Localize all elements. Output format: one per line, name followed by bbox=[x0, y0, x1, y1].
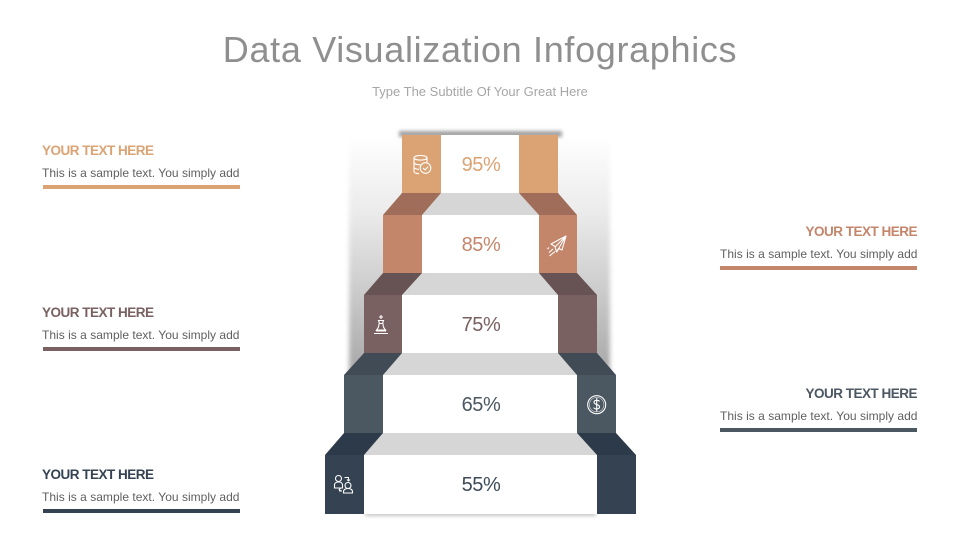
tread 65% bbox=[344, 353, 616, 375]
step 95% bbox=[402, 135, 558, 193]
icon: people exchange bbox=[334, 476, 352, 493]
step 75%: 75% bbox=[462, 314, 501, 336]
body text: This is a sample text. You simply add bbox=[720, 246, 918, 260]
rule bbox=[720, 428, 917, 432]
step 65% bbox=[344, 375, 616, 433]
step 85%: 85% bbox=[462, 234, 501, 256]
icon: database check bbox=[414, 156, 431, 174]
step 95%: 95% bbox=[462, 154, 501, 176]
rule bbox=[43, 509, 240, 513]
step 55%: 55% bbox=[462, 474, 501, 496]
body text: This is a sample text. You simply add bbox=[720, 408, 918, 422]
top shadow bbox=[399, 131, 562, 137]
icon: paper plane bbox=[548, 236, 566, 256]
wall shadow bbox=[349, 135, 610, 380]
bottom shadow bbox=[365, 512, 596, 516]
text block: 85% bbox=[720, 224, 918, 270]
tread 85% bbox=[383, 193, 577, 215]
step 55% bbox=[325, 455, 636, 514]
text block: 55% bbox=[42, 467, 240, 513]
title: Data Visualization Infographics bbox=[223, 29, 737, 70]
body text: This is a sample text. You simply add bbox=[42, 166, 240, 180]
step 75% bbox=[364, 295, 597, 353]
step 85% bbox=[383, 215, 577, 273]
body text: This is a sample text. You simply add bbox=[42, 328, 240, 342]
rule bbox=[720, 266, 917, 270]
heading: YOUR TEXT HERE bbox=[805, 386, 917, 401]
text block: 65% bbox=[720, 386, 918, 432]
tread 55% bbox=[325, 433, 636, 455]
tread 75% bbox=[364, 273, 597, 295]
subtitle: Type The Subtitle Of Your Great Here bbox=[372, 84, 588, 99]
text block: 95% bbox=[42, 143, 240, 189]
icon: dollar coin bbox=[588, 396, 606, 414]
rule bbox=[43, 347, 240, 351]
heading: YOUR TEXT HERE bbox=[42, 467, 154, 482]
step 65%: 65% bbox=[462, 394, 501, 416]
rule bbox=[43, 185, 240, 189]
body text: This is a sample text. You simply add bbox=[42, 490, 240, 504]
heading: YOUR TEXT HERE bbox=[42, 305, 154, 320]
icon: chess piece bbox=[374, 315, 388, 334]
text block: 75% bbox=[42, 305, 240, 351]
heading: YOUR TEXT HERE bbox=[805, 224, 917, 239]
heading: YOUR TEXT HERE bbox=[42, 143, 154, 158]
